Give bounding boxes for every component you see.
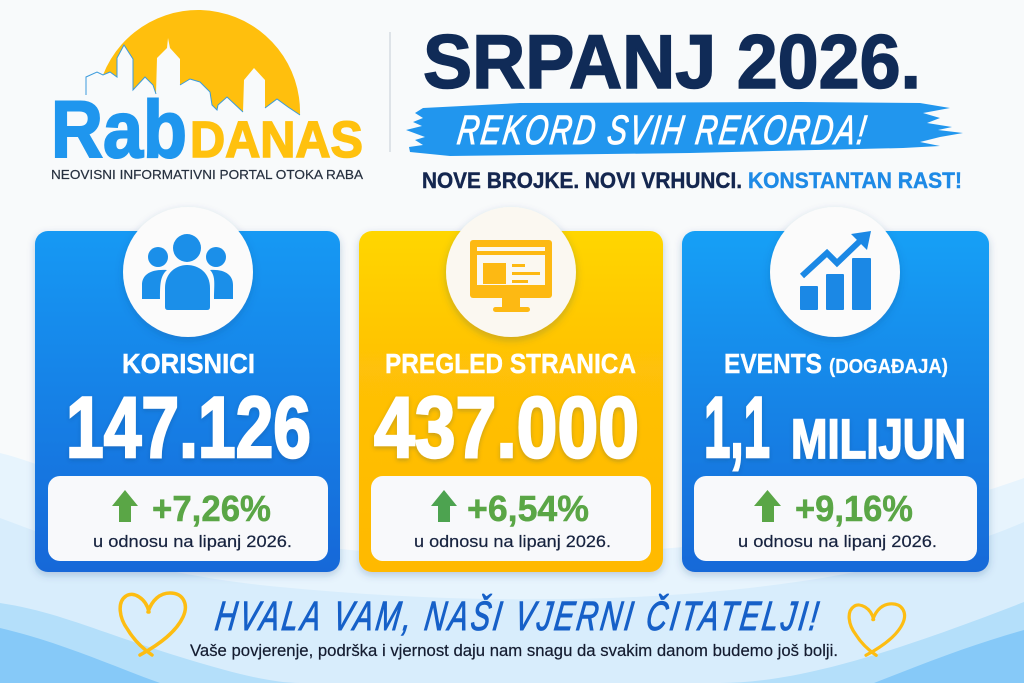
logo skyline outline [86, 45, 300, 115]
icon: up arrow [431, 490, 457, 522]
label: (DOGAĐAJA) [829, 356, 948, 378]
comparison note: u odnosu na lipanj 2026. [93, 532, 292, 551]
label [724, 348, 948, 379]
logo word Rab: Rab [51, 85, 187, 175]
percent: +7,26% [152, 488, 271, 529]
change box [694, 476, 977, 561]
percent: +9,16% [795, 488, 913, 529]
subtitle: NOVE BROJKE. NOVI VRHUNCI. [422, 168, 742, 193]
subtitle: KONSTANTAN RAST! [748, 168, 962, 193]
title: SRPANJ 2026. [423, 20, 921, 105]
brush stroke [406, 102, 963, 156]
label: PREGLED STRANICA [385, 348, 636, 379]
icon: up arrow [112, 490, 138, 522]
brush banner [406, 102, 963, 156]
label: EVENTS [724, 348, 822, 379]
banner text: REKORD SVIH REKORDA! [455, 107, 871, 153]
panel: pregled stranica [359, 207, 663, 572]
logo: Rab Danas [51, 10, 363, 182]
number: 147.126 [66, 380, 311, 476]
comparison note: u odnosu na lipanj 2026. [738, 532, 937, 551]
comparison note: u odnosu na lipanj 2026. [414, 532, 611, 551]
percent: +6,54% [467, 488, 589, 529]
number: 1,1 [704, 380, 770, 476]
change box [48, 476, 328, 561]
icon: monitor [446, 207, 576, 337]
icon: growth chart [770, 207, 900, 337]
icon: users [123, 207, 253, 337]
label: KORISNICI [122, 348, 255, 379]
icon: right heart [849, 604, 905, 655]
subtitle [422, 168, 962, 193]
panel: korisnici [35, 207, 340, 572]
number: MILIJUN [791, 407, 966, 470]
icon: up arrow [754, 490, 781, 522]
logo sun and skyline [103, 10, 300, 115]
panel: events [682, 207, 989, 572]
thank-you message: Vaše povjerenje, podrška i vjernost daju nam snagu da svakim danom budemo još bolji. [190, 641, 838, 660]
change box [371, 476, 651, 561]
number: 437.000 [374, 380, 639, 476]
number [704, 380, 966, 476]
logo word DANAS: DANAS [190, 111, 363, 168]
logo tagline: NEOVISNI INFORMATIVNI PORTAL OTOKA RABA [51, 167, 363, 182]
icon: left heart [120, 593, 185, 655]
